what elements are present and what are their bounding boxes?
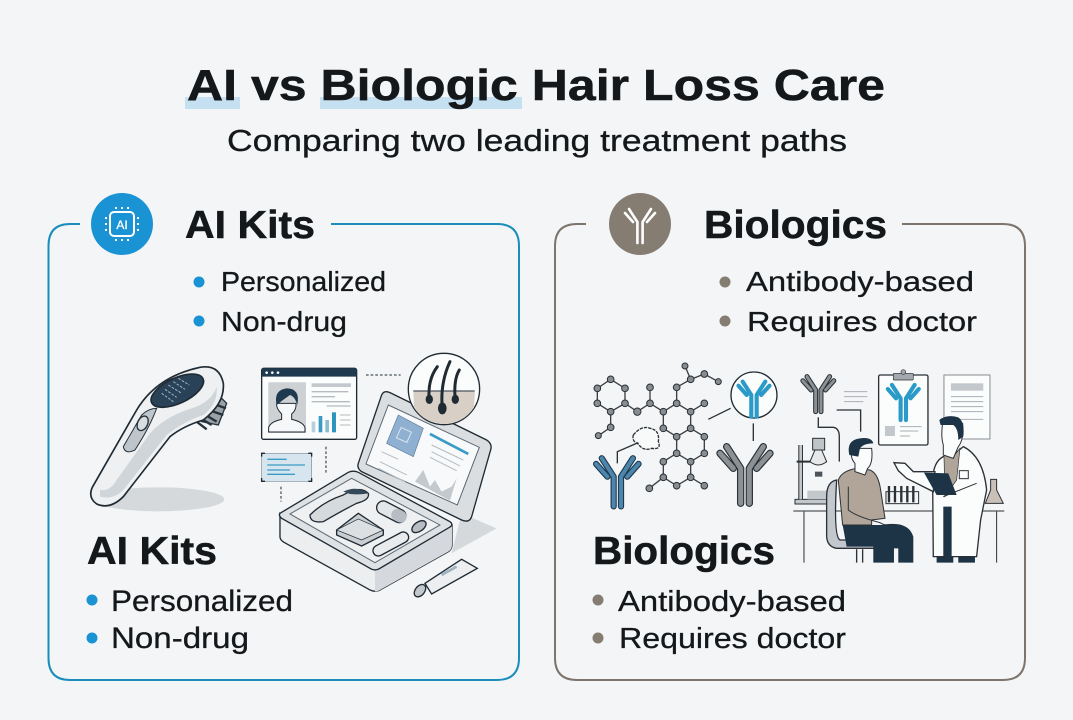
kit lid — [358, 392, 491, 521]
data card — [262, 453, 312, 481]
kit base — [279, 471, 452, 592]
antibody magnifier — [731, 372, 777, 418]
upper bullet list: Requires doctor — [747, 306, 977, 337]
hair follicle magnifier — [408, 353, 480, 425]
callout lines — [617, 408, 753, 463]
blue antibody — [596, 458, 639, 506]
lower bullet list: Requires doctor — [619, 623, 846, 655]
lab bench — [793, 511, 1004, 563]
icon: AI chip: AI — [116, 218, 128, 232]
report sheet — [944, 375, 990, 439]
illustration: doctor and patient — [793, 370, 1004, 563]
molecule network — [594, 363, 721, 492]
upper bullet list — [720, 266, 977, 337]
flask — [985, 479, 1003, 503]
annotation lines — [844, 392, 867, 402]
upper bullet list: Non-drug — [221, 306, 347, 337]
lower heading: Biologics: Biologics — [593, 530, 775, 573]
illustration: AI kit — [262, 353, 497, 599]
lower bullet list: Personalized — [111, 585, 293, 618]
illustration: hair brush device — [91, 367, 227, 511]
lower heading: AI Kits: AI Kits — [87, 530, 217, 573]
lower bullet list — [86, 585, 293, 655]
panel: Biologics — [555, 193, 1025, 680]
subtitle: Comparing two leading treatment paths — [227, 123, 847, 158]
lower bullet list: Antibody-based — [618, 586, 846, 618]
protein blob — [633, 427, 659, 449]
heading: Biologics: Biologics — [704, 204, 887, 247]
patient and chair — [827, 438, 913, 563]
illustration: molecules and antibodies — [594, 363, 777, 506]
upper bullet list: Antibody-based — [746, 266, 974, 297]
test tubes — [886, 486, 919, 504]
panel: AI Kits — [48, 193, 519, 680]
title: AI vs Biologic Hair Loss Care — [187, 61, 885, 110]
upper bullet list — [194, 266, 386, 337]
clipboard — [879, 370, 928, 445]
connectors — [281, 375, 401, 502]
small antibody — [803, 377, 834, 412]
scan window — [262, 368, 357, 439]
icon: antibody badge — [609, 193, 671, 255]
doctor — [894, 416, 987, 563]
icon: AI chip — [91, 193, 153, 255]
cream tube — [412, 559, 477, 599]
upper bullet list: Personalized — [221, 266, 386, 297]
kit shadow — [452, 513, 497, 553]
lower bullet list: Non-drug — [111, 622, 249, 655]
microscope — [795, 438, 828, 504]
lower bullet list — [592, 586, 846, 655]
heading: AI Kits: AI Kits — [185, 204, 315, 247]
grey antibody — [720, 447, 770, 503]
